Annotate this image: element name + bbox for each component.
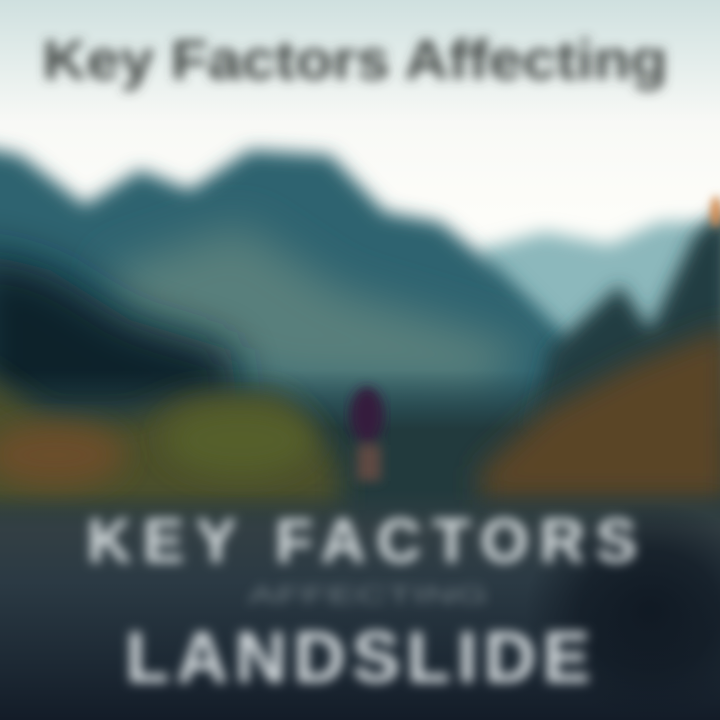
main mountains: [0, 145, 570, 480]
orange accent: [711, 196, 720, 228]
figure torso: [350, 387, 384, 443]
heading line one: KEY FACTORS: [87, 507, 637, 576]
heading line two: LANDSLIDE: [126, 618, 590, 698]
river foreground: [0, 490, 720, 720]
figure legs: [357, 445, 381, 481]
distant mountains: [480, 222, 720, 360]
autumn hillside right: [480, 325, 720, 500]
left dark forest: [0, 250, 240, 420]
figure: [350, 387, 384, 481]
mountain slopes: [110, 225, 530, 390]
central dark valley: [0, 370, 720, 540]
top title: Key Factors Affecting: [42, 28, 668, 91]
mountain landscape: [0, 145, 720, 540]
small middle line: AFFECTING: [248, 582, 488, 609]
green shrub: [165, 404, 315, 476]
right side trees: [530, 205, 720, 430]
dark foreground right: [525, 502, 720, 718]
autumn hillside left: [0, 365, 340, 510]
brown patch left: [0, 423, 125, 487]
